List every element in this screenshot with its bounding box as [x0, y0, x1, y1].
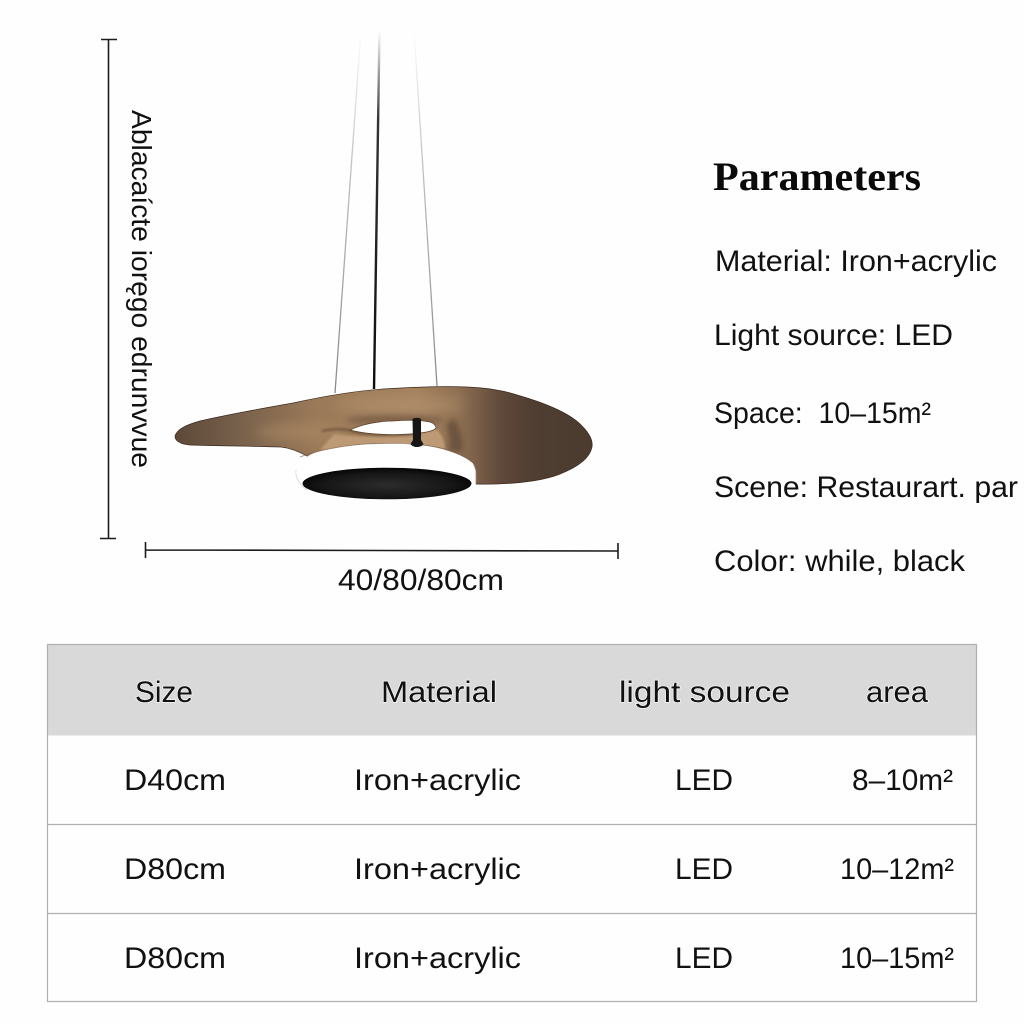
table frame	[48, 644, 976, 1002]
parameters panel	[713, 154, 1018, 578]
row 3: 10–15m²	[840, 942, 954, 975]
row 3	[124, 942, 954, 975]
horizontal dimension line	[145, 542, 618, 559]
table header band	[48, 644, 976, 736]
material line: Material: Iron+acrylic	[715, 245, 997, 278]
header: light source: light source	[619, 676, 790, 709]
ring top edge	[300, 443, 476, 484]
shade opening	[350, 420, 436, 435]
suspension wires	[335, 30, 437, 393]
row 2	[124, 853, 954, 886]
space line: Space: 10–15m²	[714, 397, 931, 430]
ring left edge	[296, 470, 307, 490]
pendant lamp illustration	[175, 30, 592, 502]
black dish	[302, 468, 472, 499]
dimension label: 40/80/80cm	[338, 564, 504, 597]
row 2: Iron+acrylic	[354, 853, 521, 886]
light source line: Light source: LED	[714, 319, 953, 352]
vertical dimension line	[100, 39, 117, 539]
black stem connector	[410, 418, 424, 447]
scene line: Scene: Restaurart. par	[714, 471, 1018, 504]
parameters heading: Parameters	[713, 154, 921, 199]
row 1: 8–10m²	[852, 764, 953, 797]
row 1	[124, 764, 953, 797]
vertical dimension label: Ablacaícte ioręgo edrunvvue	[126, 110, 157, 468]
row 2: 10–12m²	[840, 853, 954, 886]
row 1: Iron+acrylic	[354, 764, 521, 797]
white ring	[296, 443, 476, 502]
row 3: Iron+acrylic	[354, 942, 521, 975]
row 2: D80cm	[124, 853, 226, 886]
lamp shade	[175, 387, 592, 484]
header: material: Material	[381, 676, 497, 709]
header: size: Size	[135, 676, 193, 709]
header: area: area	[866, 676, 928, 709]
row 1: D40cm	[124, 764, 226, 797]
specification table	[48, 644, 976, 1002]
row 1: LED	[675, 764, 733, 797]
color line: Color: while, black	[714, 545, 966, 578]
row 3: LED	[675, 942, 733, 975]
row 2: LED	[675, 853, 733, 886]
row 3: D80cm	[124, 942, 226, 975]
